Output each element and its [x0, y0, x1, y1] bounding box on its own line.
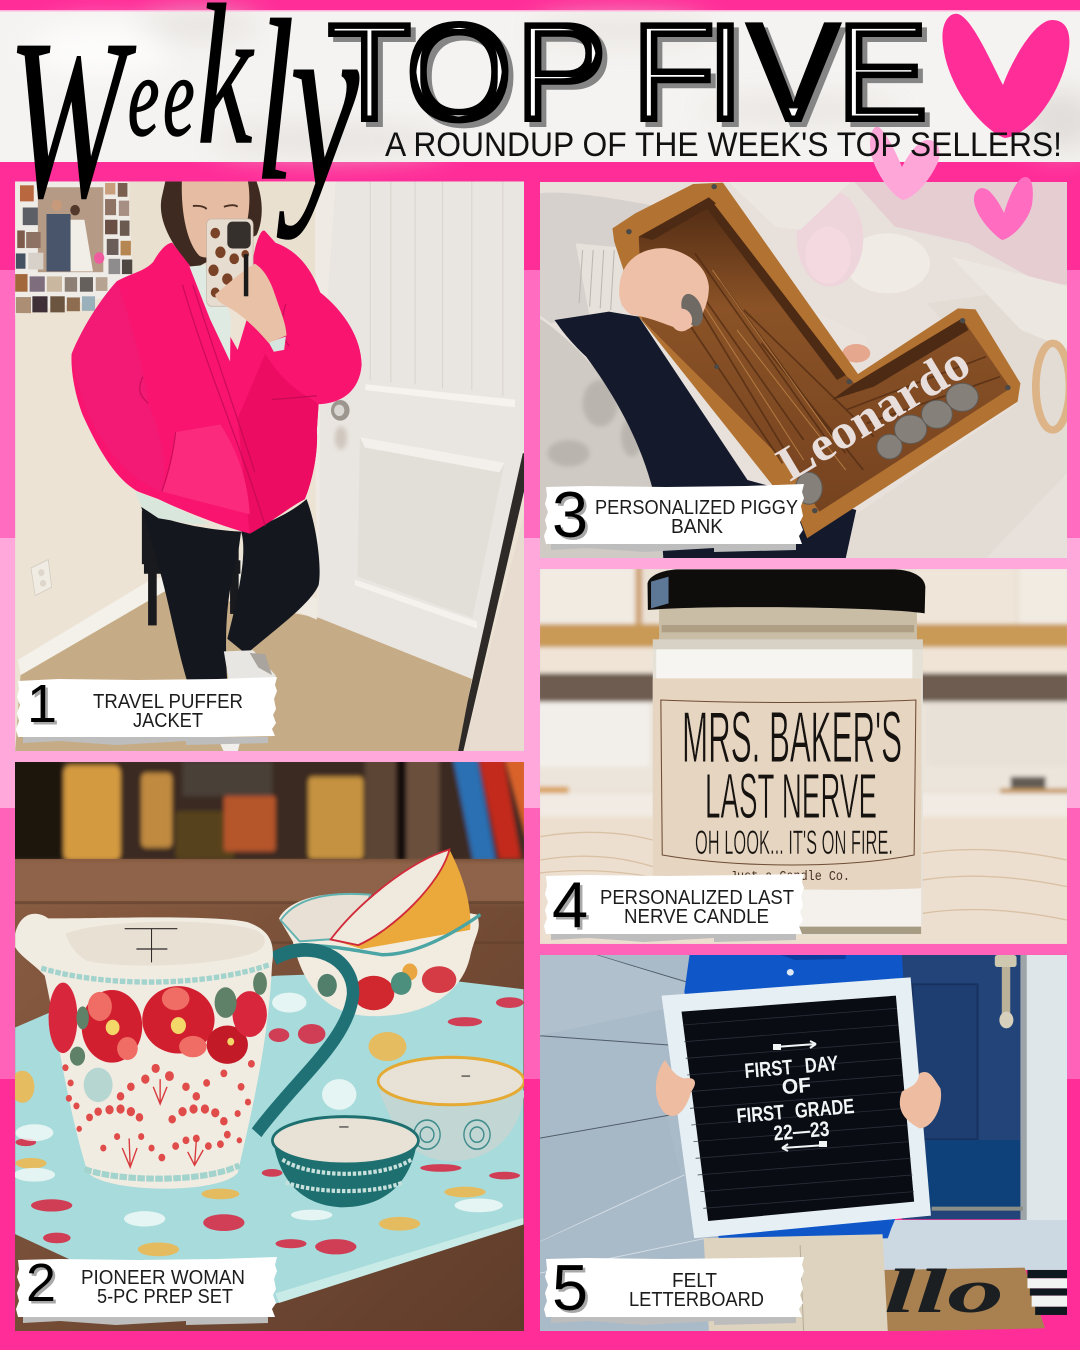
label 1: travel puffer jacket — [16, 674, 277, 745]
letterboard text: FIRST GRADE — [736, 1095, 855, 1128]
panel 3: personalized piggy bank photo — [537, 180, 1070, 560]
label 2: pioneer woman prep set: 5-PC PREP SET — [97, 1286, 233, 1308]
back bowl and yellow cup — [279, 850, 480, 1016]
wall photo collage — [15, 181, 133, 315]
grey sweater — [537, 193, 667, 558]
label 5: felt letterboard: LETTERBOARD — [629, 1289, 764, 1311]
label 2: pioneer woman prep set: 2 — [26, 1253, 56, 1313]
label 5: felt letterboard — [544, 1251, 804, 1325]
blurred shelf background — [15, 762, 524, 860]
label 3: personalized piggy bank — [544, 478, 804, 552]
heart: medium pink — [974, 177, 1033, 240]
letterboard text: OF — [781, 1074, 812, 1099]
label 3: personalized piggy bank: BANK — [671, 516, 724, 538]
label 4: personalized last nerve candle: NERVE CANDLE — [624, 906, 769, 928]
label 1: travel puffer jacket: TRAVEL PUFFER — [93, 691, 243, 713]
letterboard text — [736, 1052, 855, 1145]
far wall and mirror edge — [463, 511, 525, 752]
script heading: Weekly: e — [128, 33, 159, 160]
heart: large hot pink — [942, 14, 1069, 138]
pink plush and blankets — [796, 182, 1067, 293]
candle jar — [648, 569, 925, 935]
label 4: personalized last nerve candle: 4 — [552, 868, 588, 941]
door — [315, 181, 525, 678]
script heading: Weekly: e — [163, 33, 195, 160]
large measuring cup — [15, 914, 273, 1189]
letterboard text: FIRST DAY — [744, 1052, 839, 1083]
Leonardo name: Leonardo — [767, 334, 979, 491]
arrows on letterboard — [773, 1041, 827, 1151]
heart: light pink — [870, 127, 940, 200]
label 2: pioneer woman prep set: PIONEER WOMAN — [81, 1267, 245, 1289]
handle — [257, 950, 353, 1133]
jeans — [555, 312, 856, 558]
hair and face — [161, 181, 262, 270]
door mat — [883, 1268, 1070, 1332]
shoes — [218, 650, 276, 752]
black lid — [648, 569, 925, 613]
label 3: personalized piggy bank: PERSONALIZED PIGGY — [595, 497, 798, 519]
house siding — [537, 952, 726, 1333]
blurred kitchen background — [537, 567, 1070, 947]
label 3: personalized piggy bank: 3 — [552, 478, 588, 551]
legs — [141, 499, 320, 683]
label 5: felt letterboard: 5 — [552, 1251, 588, 1324]
scallop dots — [62, 1060, 255, 1167]
wood ring — [1036, 343, 1070, 430]
letterboard text: 22—23 — [773, 1118, 830, 1145]
right bowl — [378, 1057, 525, 1161]
hands — [656, 1060, 941, 1128]
label 2: pioneer woman prep set — [16, 1253, 277, 1325]
label 5: felt letterboard: FELT — [672, 1270, 717, 1292]
panel 4: personalized last nerve candle photo — [537, 567, 1070, 947]
second hand under bank — [842, 344, 870, 363]
wood table — [10, 859, 527, 1334]
aqua floral towel — [10, 972, 523, 1322]
sweater hem — [135, 491, 210, 524]
panel 2: pioneer woman prep set photo — [10, 758, 527, 1334]
leopard phone — [207, 219, 253, 306]
label text: Just a Candle Co. — [730, 869, 850, 885]
hand holding phone — [215, 264, 287, 343]
label text — [682, 698, 902, 885]
pink puffer jacket — [71, 230, 362, 534]
label 1: travel puffer jacket: 1 — [27, 674, 57, 734]
wooden letter L bank — [612, 183, 1020, 538]
chair — [142, 511, 240, 625]
script heading: Weekly: W — [8, 0, 136, 244]
carpet and baseboard — [15, 587, 472, 752]
label 4: personalized last nerve candle — [544, 868, 804, 942]
blue shirt and khaki shorts — [684, 954, 904, 1332]
sweater at neck — [189, 265, 231, 361]
mat lettering: llo — [884, 1258, 1004, 1326]
baby hand and coin — [579, 248, 709, 331]
floral band — [49, 983, 267, 1064]
outlet — [31, 560, 52, 596]
header marble band — [0, 10, 1080, 162]
kraft label — [653, 678, 921, 890]
blue door and trim — [881, 954, 1070, 1270]
label 4: personalized last nerve candle: PERSONALIZED LAST — [600, 887, 794, 909]
label 1: travel puffer jacket: JACKET — [133, 710, 203, 732]
panel 1: travel puffer jacket photo — [15, 181, 525, 752]
panel 5: felt letterboard photo — [537, 952, 1070, 1333]
small teal bowl — [272, 1117, 418, 1207]
letterboard frame — [662, 977, 931, 1238]
coins — [796, 383, 978, 504]
